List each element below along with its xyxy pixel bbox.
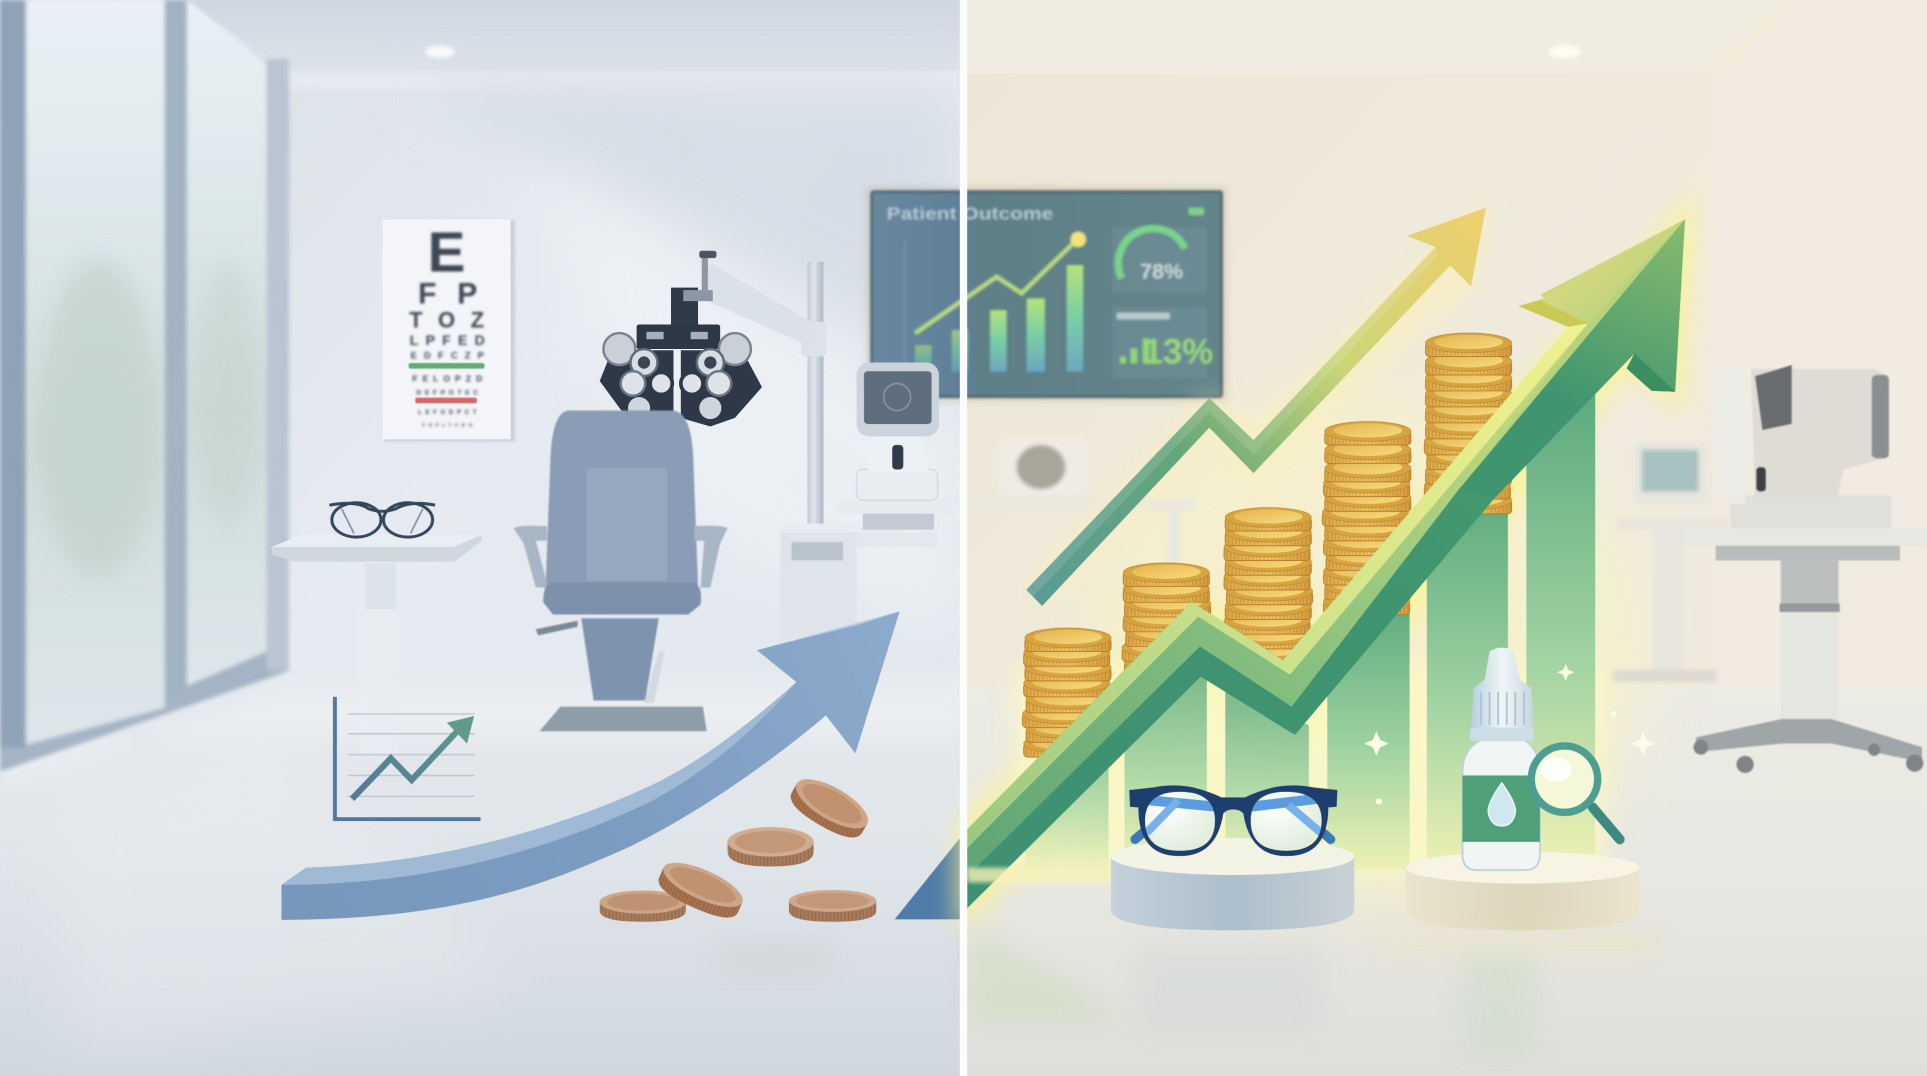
icon: eye drop bottle [1462, 648, 1540, 870]
chart letters T O Z: T O Z [409, 307, 484, 332]
green arrow barb fold [1518, 300, 1588, 327]
gold coin stack 3 [1224, 508, 1313, 664]
cabinet behind refractor stand [780, 522, 938, 639]
glasses lenses [1144, 790, 1216, 851]
right table base [1696, 719, 1922, 762]
chart row 4: LPFED [410, 332, 485, 348]
right back table and small monitor [1612, 442, 1728, 682]
eye chart poster [383, 219, 515, 442]
ceiling light right [1548, 45, 1580, 58]
green arrow lit band [967, 219, 1685, 876]
right side wall [1714, 0, 1927, 737]
right phoropter pod [681, 333, 762, 426]
phoropter head [600, 288, 762, 426]
refractor lens panel [1755, 365, 1792, 430]
phoropter arm and pole [699, 251, 826, 524]
green arrow head lit face [1540, 219, 1685, 323]
bottle cap [1471, 648, 1534, 728]
glow behind rising arrow [967, 208, 1685, 908]
glowing green bars [1025, 383, 1595, 870]
copper coin 2 [654, 854, 748, 925]
chart row 8: LEFODPCT [418, 410, 477, 416]
ceiling right [964, 0, 1794, 74]
gold coin stack 2 [1122, 563, 1212, 676]
gold coin stack 1 [1022, 628, 1112, 757]
glasses temple tips [1135, 830, 1331, 839]
green bar 5 [1427, 483, 1508, 870]
chair arms [514, 526, 548, 587]
eye chart poster: P [457, 277, 477, 310]
chart row 6: FELOPZD [412, 374, 482, 384]
green arrow head dark face [1460, 219, 1685, 498]
autorefractor on right table [1681, 365, 1927, 773]
podium right [1406, 852, 1639, 930]
bottle body [1462, 740, 1540, 870]
panel: left clinic background [0, 0, 964, 1076]
floor reflections right [971, 928, 1659, 1057]
big green rising arrow [967, 219, 1685, 908]
bottle collar [1470, 728, 1534, 741]
mini chart grid [348, 714, 474, 796]
blurred right wall device [967, 439, 1196, 573]
podium left [1111, 838, 1354, 930]
left phoropter pod [600, 333, 673, 426]
chair back [546, 410, 698, 585]
ceiling left [184, 0, 963, 71]
gold coin stack 4 [1322, 422, 1412, 615]
monitor bars [915, 265, 1083, 372]
copper coin 5 [789, 890, 876, 922]
copper coin 3 [728, 827, 814, 866]
icon: glasses on table [329, 503, 435, 537]
icon: magnifying glass [1531, 746, 1620, 839]
pale bar base band [967, 868, 1115, 882]
monitor title: Patient Outcome [887, 203, 1054, 223]
small blue wedge at divider [895, 838, 960, 919]
left floor [0, 671, 964, 1076]
green bar 4 [1327, 595, 1410, 870]
right table top [1681, 528, 1927, 546]
monitor: patient outcomes dashboard [867, 187, 1227, 402]
monitor trend line [915, 238, 1078, 333]
icon: blue eyeglasses [1129, 785, 1337, 856]
green arrow pale top face [967, 323, 1588, 848]
red line marker [415, 398, 477, 403]
exam chair [514, 410, 728, 731]
green line marker [409, 363, 485, 369]
center divider line [960, 0, 967, 1076]
thin yellow-green arrow [1026, 208, 1486, 606]
green bar 6 [1526, 383, 1595, 870]
ceiling light left [425, 45, 455, 58]
monitor status pill [1188, 207, 1204, 215]
green bar 1 [1025, 730, 1109, 870]
chart letters F P: F [418, 277, 436, 310]
chair pedestal [581, 618, 659, 701]
refractor base [1730, 495, 1891, 528]
green arrow underside fold [1627, 353, 1675, 392]
window wall [0, 0, 289, 772]
blue arrow top surface [281, 682, 796, 885]
chair base plate [540, 707, 707, 731]
green arrow dark lower band [967, 219, 1685, 908]
thin arrow highlight [1026, 247, 1438, 597]
side table [272, 535, 482, 756]
mini chart trend arrow [352, 731, 457, 799]
right floor [964, 688, 1927, 1076]
monitor stats panel [1112, 307, 1207, 378]
mini growth chart [335, 697, 481, 819]
monitor y axis [903, 240, 906, 372]
chart row 7: DEFPOTEC [416, 389, 478, 396]
autorefractor on left [836, 363, 959, 530]
copper coin 1 [600, 890, 686, 922]
refractor body [1751, 369, 1889, 498]
glasses frame [1129, 785, 1337, 856]
right table stand [1781, 560, 1839, 607]
bottle label [1462, 775, 1540, 842]
chart row 5: EDFCZP [411, 350, 484, 360]
glasses inner temples [1147, 798, 1321, 807]
blurred coin reflection on floor [713, 944, 836, 973]
chart letter E: E [428, 221, 465, 284]
monitor stat value: 13% [1143, 332, 1213, 371]
gold coin stack 5 [1424, 333, 1513, 514]
copper coins [600, 770, 876, 925]
mini chart axes [335, 697, 481, 819]
panel: right clinic background [964, 0, 1927, 1076]
green bar 3 [1225, 691, 1309, 870]
sparkles [1364, 664, 1655, 804]
green bar 2 [1124, 670, 1207, 870]
chart row 9: FDPLTCEO [422, 423, 473, 428]
monitor gauge value: 78% [1140, 260, 1183, 284]
refractor column [1712, 368, 1745, 504]
big blue arrow [281, 611, 900, 920]
copper coin 4 [785, 770, 875, 845]
monitor gauge panel [1112, 227, 1207, 293]
water drop [1488, 783, 1515, 826]
chair seat [543, 583, 701, 615]
